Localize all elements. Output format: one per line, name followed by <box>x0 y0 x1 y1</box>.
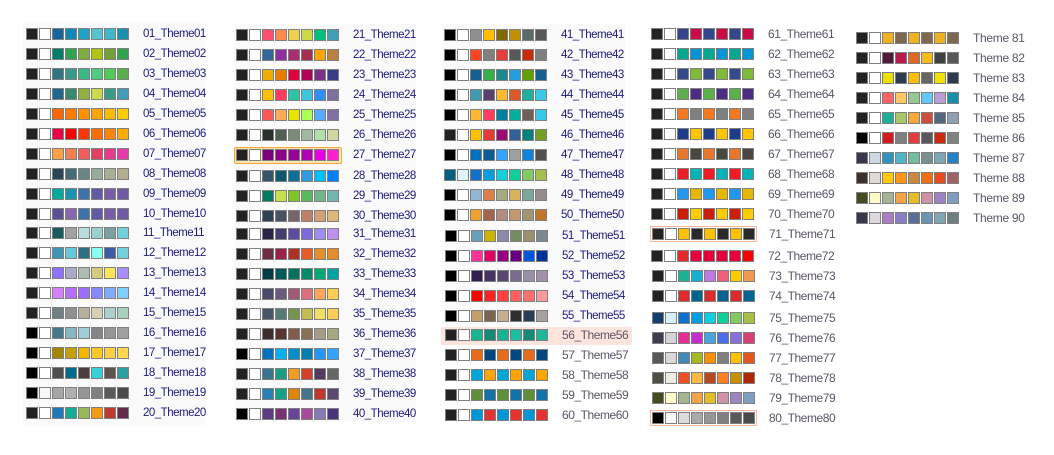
theme 80 row <box>652 412 835 424</box>
theme 34 row <box>236 288 416 300</box>
theme 64 row: 64_Theme64 <box>768 87 834 101</box>
theme 20 row <box>26 407 206 419</box>
theme 71 row: 71_Theme71 <box>769 227 835 241</box>
theme 09 row: 09_Theme09 <box>143 188 206 200</box>
theme 56 row: 56_Theme56 <box>562 328 628 342</box>
theme 31 row: 31_Theme31 <box>353 228 416 240</box>
theme 77 row <box>652 352 835 364</box>
theme 33 row <box>236 268 416 280</box>
theme 73 row <box>652 270 835 282</box>
theme 19 row: 19_Theme19 <box>143 387 206 399</box>
theme 67 row: 67_Theme67 <box>768 147 834 161</box>
theme 57 row: 57_Theme57 <box>562 348 628 362</box>
theme 40 row: 40_Theme40 <box>353 408 416 420</box>
theme 76 row <box>652 332 835 344</box>
theme 11 row <box>26 227 204 239</box>
theme 78 row: 78_Theme78 <box>769 371 835 385</box>
theme 83 row <box>856 72 1025 84</box>
theme 43 row: 43_Theme43 <box>561 69 624 81</box>
theme 13 row: 13_Theme13 <box>143 267 206 279</box>
theme 18 row <box>26 367 206 379</box>
theme 11 row: 11_Theme11 <box>143 227 204 239</box>
theme 75 row <box>652 312 835 324</box>
theme 09 row <box>26 188 206 200</box>
theme 74 row: 74_Theme74 <box>769 289 835 303</box>
theme 22 row <box>236 49 416 61</box>
theme 87 row <box>856 152 1025 164</box>
theme 46 row: 46_Theme46 <box>561 129 624 141</box>
theme 37 row <box>236 348 416 360</box>
theme 15 row: 15_Theme15 <box>143 307 206 319</box>
theme 77 row: 77_Theme77 <box>769 351 835 365</box>
panel: column 1 background <box>23 23 206 425</box>
theme 54 row <box>445 290 625 302</box>
theme 55 row <box>445 310 625 322</box>
theme 58 row: 58_Theme58 <box>562 368 628 382</box>
theme 38 row <box>236 368 416 380</box>
theme 71 row <box>652 228 835 240</box>
theme 68 row: 68_Theme68 <box>768 167 834 181</box>
theme 24 row: 24_Theme24 <box>353 89 416 101</box>
theme 70 row: 70_Theme70 <box>768 207 834 221</box>
theme 35 row: 35_Theme35 <box>353 308 416 320</box>
theme 18 row: 18_Theme18 <box>143 367 206 379</box>
theme 02 row: 02_Theme02 <box>143 48 206 60</box>
theme 12 row <box>26 247 206 259</box>
theme 84 row <box>856 92 1025 104</box>
theme 32 row: 32_Theme32 <box>353 248 416 260</box>
theme 19 row <box>26 387 206 399</box>
theme 59 row: 59_Theme59 <box>562 388 628 402</box>
theme 62 row: 62_Theme62 <box>768 47 834 61</box>
theme 27 row: 27_Theme27 <box>353 149 416 161</box>
theme 78 row <box>652 372 835 384</box>
theme 48 row <box>444 169 624 181</box>
theme 39 row: 39_Theme39 <box>353 388 416 400</box>
theme 57 row <box>445 349 628 361</box>
theme 90 row: Theme 90 <box>973 211 1025 225</box>
theme 49 row: 49_Theme49 <box>561 189 624 201</box>
theme 25 row: 25_Theme25 <box>353 109 416 121</box>
theme 40 row <box>236 408 416 420</box>
theme 28 row: 28_Theme28 <box>353 170 416 182</box>
highlight band: theme 56 <box>441 327 632 345</box>
theme 89 row <box>856 192 1025 204</box>
highlight: theme 71 <box>650 226 757 242</box>
theme 60 row <box>445 409 628 421</box>
theme 49 row <box>444 189 624 201</box>
theme 32 row <box>236 248 416 260</box>
theme 08 row <box>26 168 206 180</box>
theme 73 row: 73_Theme73 <box>769 269 835 283</box>
theme 45 row: 45_Theme45 <box>561 109 624 121</box>
theme 10 row: 10_Theme10 <box>143 208 206 220</box>
theme 37 row: 37_Theme37 <box>353 348 416 360</box>
theme 82 row: Theme 82 <box>973 51 1025 65</box>
theme 55 row: 55_Theme55 <box>562 310 625 322</box>
theme 86 row: Theme 86 <box>973 131 1025 145</box>
theme 17 row: 17_Theme17 <box>143 347 206 359</box>
theme 85 row: Theme 85 <box>973 111 1025 125</box>
theme 42 row: 42_Theme42 <box>561 49 624 61</box>
theme 36 row <box>236 328 416 340</box>
theme 90 row <box>856 212 1025 224</box>
theme 22 row: 22_Theme22 <box>353 49 416 61</box>
theme 88 row: Theme 88 <box>973 171 1025 185</box>
theme 51 row: 51_Theme51 <box>562 230 625 242</box>
theme 72 row <box>651 250 834 262</box>
theme 03 row: 03_Theme03 <box>143 68 206 80</box>
theme 65 row: 65_Theme65 <box>768 107 834 121</box>
theme 88 row <box>856 172 1025 184</box>
theme 39 row <box>236 388 416 400</box>
theme 38 row: 38_Theme38 <box>353 368 416 380</box>
theme 59 row <box>445 389 628 401</box>
theme 51 row <box>445 230 625 242</box>
theme 79 row: 79_Theme79 <box>769 391 835 405</box>
theme 14 row <box>26 287 206 299</box>
theme 53 row <box>445 270 625 282</box>
theme 25 row <box>236 109 416 121</box>
theme 87 row: Theme 87 <box>973 151 1025 165</box>
theme 45 row <box>444 109 624 121</box>
theme 69 row <box>651 188 834 200</box>
theme 14 row: 14_Theme14 <box>143 287 206 299</box>
theme 06 row <box>26 128 206 140</box>
theme 62 row <box>651 48 834 60</box>
theme 30 row <box>236 210 416 222</box>
theme 54 row: 54_Theme54 <box>562 290 625 302</box>
theme 53 row: 53_Theme53 <box>562 270 625 282</box>
theme 63 row: 63_Theme63 <box>768 67 834 81</box>
theme 41 row: 41_Theme41 <box>561 29 624 41</box>
theme 05 row: 05_Theme05 <box>143 108 206 120</box>
theme 20 row: 20_Theme20 <box>143 407 206 419</box>
theme 61 row: 61_Theme61 <box>768 27 834 41</box>
theme 08 row: 08_Theme08 <box>143 168 206 180</box>
theme 10 row <box>26 208 206 220</box>
theme 74 row <box>652 290 835 302</box>
theme 44 row: 44_Theme44 <box>561 89 624 101</box>
theme 47 row: 47_Theme47 <box>561 149 624 161</box>
theme 72 row: 72_Theme72 <box>768 249 834 263</box>
theme 66 row <box>651 128 834 140</box>
theme 68 row <box>651 168 834 180</box>
theme 66 row: 66_Theme66 <box>768 127 834 141</box>
theme 07 row: 07_Theme07 <box>143 148 206 160</box>
theme 17 row <box>26 347 206 359</box>
theme 47 row <box>444 149 624 161</box>
theme 07 row <box>26 148 206 160</box>
theme 30 row: 30_Theme30 <box>353 210 416 222</box>
theme 42 row <box>444 49 624 61</box>
theme 85 row <box>856 112 1025 124</box>
theme 21 row: 21_Theme21 <box>353 29 416 41</box>
theme 26 row <box>236 129 416 141</box>
theme 43 row <box>444 69 624 81</box>
theme 26 row: 26_Theme26 <box>353 129 416 141</box>
theme 46 row <box>444 129 624 141</box>
theme 52 row: 52_Theme52 <box>562 250 625 262</box>
theme 81 row: Theme 81 <box>973 31 1025 45</box>
theme 24 row <box>236 89 416 101</box>
theme 65 row <box>651 108 834 120</box>
theme 03 row <box>26 68 206 80</box>
theme 86 row <box>856 132 1025 144</box>
theme 29 row <box>236 190 416 202</box>
theme 76 row: 76_Theme76 <box>769 331 835 345</box>
theme 23 row: 23_Theme23 <box>353 69 416 81</box>
theme 01 row: 01_Theme01 <box>143 28 206 40</box>
theme 61 row <box>651 28 834 40</box>
theme 44 row <box>444 89 624 101</box>
theme 83 row: Theme 83 <box>973 71 1025 85</box>
theme 75 row: 75_Theme75 <box>769 311 835 325</box>
theme 12 row: 12_Theme12 <box>143 247 206 259</box>
highlight: theme 27 <box>234 147 342 164</box>
theme 64 row <box>651 88 834 100</box>
theme 50 row <box>444 209 624 221</box>
theme 41 row <box>444 29 624 41</box>
theme 04 row: 04_Theme04 <box>143 88 206 100</box>
theme 36 row: 36_Theme36 <box>353 328 416 340</box>
theme 79 row <box>652 392 835 404</box>
theme 31 row <box>236 228 416 240</box>
theme 56 row <box>445 329 628 341</box>
theme 60 row: 60_Theme60 <box>562 408 628 422</box>
theme 02 row <box>26 48 206 60</box>
theme 05 row <box>26 108 206 120</box>
highlight: theme 80 <box>650 410 757 426</box>
theme 89 row: Theme 89 <box>973 191 1025 205</box>
theme 84 row: Theme 84 <box>973 91 1025 105</box>
theme 50 row: 50_Theme50 <box>561 209 624 221</box>
theme 06 row: 06_Theme06 <box>143 128 206 140</box>
theme 21 row <box>236 29 416 41</box>
theme 80 row: 80_Theme80 <box>769 411 835 425</box>
theme 16 row <box>26 327 206 339</box>
theme 13 row <box>26 267 206 279</box>
theme 52 row <box>445 250 625 262</box>
theme 15 row <box>26 307 206 319</box>
theme 23 row <box>236 69 416 81</box>
panel: column 3 background <box>442 24 625 326</box>
theme 34 row: 34_Theme34 <box>353 288 416 300</box>
theme 29 row: 29_Theme29 <box>353 190 416 202</box>
theme 48 row: 48_Theme48 <box>561 169 624 181</box>
theme 82 row <box>856 52 1025 64</box>
theme 01 row <box>26 28 206 40</box>
theme 33 row: 33_Theme33 <box>353 268 416 280</box>
theme 28 row <box>236 170 416 182</box>
theme 81 row <box>856 32 1025 44</box>
theme 27 row <box>236 149 416 161</box>
theme 63 row <box>651 68 834 80</box>
theme 70 row <box>651 208 834 220</box>
theme 67 row <box>651 148 834 160</box>
theme 58 row <box>445 369 628 381</box>
theme 16 row: 16_Theme16 <box>143 327 206 339</box>
panel: column 2 background <box>234 24 416 422</box>
theme 69 row: 69_Theme69 <box>768 187 834 201</box>
theme 35 row <box>236 308 416 320</box>
theme 04 row <box>26 88 206 100</box>
